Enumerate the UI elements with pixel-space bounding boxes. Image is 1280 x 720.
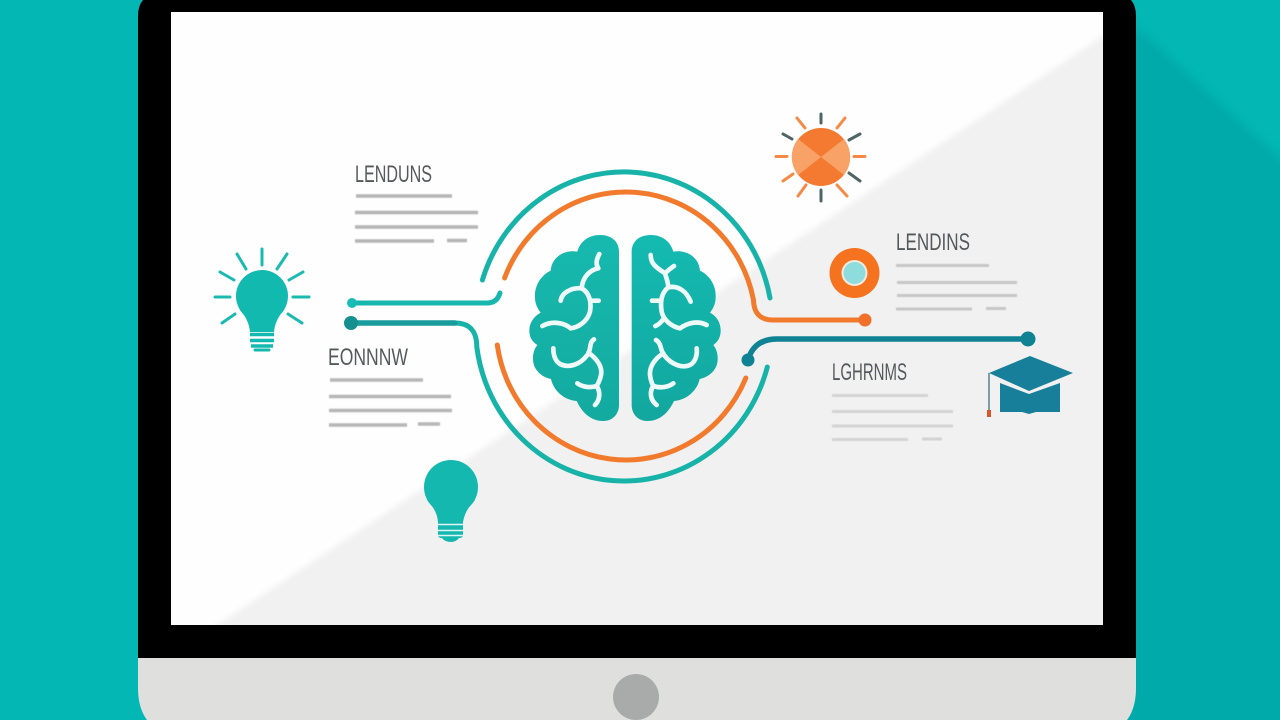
body lines (896, 266, 1017, 309)
body lines (329, 380, 452, 425)
outer ring top arc (482, 172, 770, 298)
panel: right text block (896, 229, 1017, 309)
inner ring bottom arc (497, 345, 746, 460)
panel: top left text block (355, 161, 478, 241)
dark segment of left connector (351, 320, 455, 326)
heading: LENDUNS (355, 161, 432, 188)
body lines (355, 196, 478, 241)
inner ring top arc with orange connector (505, 192, 865, 320)
heading: LENDINS (896, 229, 970, 256)
icon: orange ring (830, 248, 880, 298)
panel: left text block (328, 344, 452, 425)
monitor (138, 0, 1136, 720)
right dark connector (748, 339, 1028, 360)
left veins (542, 254, 601, 405)
icon: sun (776, 114, 865, 201)
home button (613, 674, 659, 720)
icon: solid light bulb (424, 460, 478, 542)
outer ring bottom arc with left connector (351, 323, 767, 481)
monitor bezel (138, 0, 1136, 658)
upper left connector (352, 293, 500, 303)
icon: graduation cap (987, 356, 1073, 417)
connector end dots (344, 298, 1036, 366)
monitor drop shadow (1120, 12, 1280, 720)
body lines (832, 396, 953, 440)
monitor chin (138, 640, 1136, 720)
heading: LGHRNMS (832, 359, 907, 386)
heading: EONNNW (328, 344, 408, 371)
right hemisphere (632, 235, 721, 421)
icon: light bulb with rays (215, 249, 309, 350)
panel: lower right text block (832, 359, 953, 440)
right veins (650, 255, 707, 405)
diagram: brain connector rings (351, 172, 1028, 481)
screen (171, 12, 1115, 640)
icon: brain (529, 235, 721, 421)
left hemisphere (529, 235, 619, 421)
